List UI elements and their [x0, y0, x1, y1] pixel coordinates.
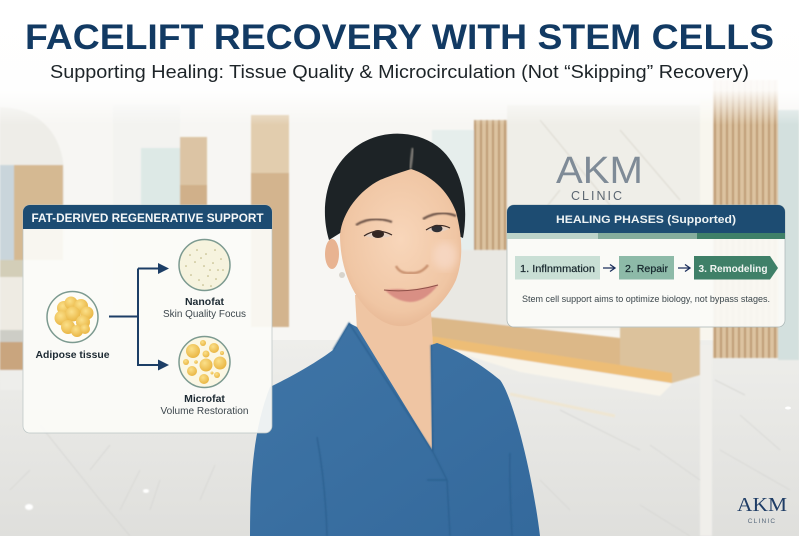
left eye: [364, 230, 392, 238]
label: nanofat: Nanofat: [185, 296, 225, 308]
logo: AKM clinic: [737, 494, 787, 525]
arrow: branching connector: [109, 263, 169, 370]
sign: AKM clinic wall logo: CLINIC: [571, 189, 624, 203]
face: [340, 169, 461, 326]
logo: AKM clinic: CLINIC: [748, 518, 776, 525]
step 1: inflammation: 1. Inflnmmation: [520, 264, 595, 275]
panel: fat-derived regenerative support: [23, 205, 272, 433]
step 1: inflammation: [515, 256, 600, 280]
step 3: remodeling: 3. Remodeling: [698, 264, 768, 275]
panel header: [507, 205, 785, 233]
neck: [355, 295, 433, 452]
hair: [325, 134, 465, 240]
logo: AKM clinic: AKM: [737, 494, 787, 516]
cheek highlight: [433, 242, 457, 270]
left eyebrow: [356, 219, 392, 225]
nose: [396, 265, 428, 273]
sign: AKM clinic wall logo: AKM: [556, 150, 643, 192]
icon: microfat: [179, 336, 230, 388]
step 2: repair: 2. Repair: [625, 264, 669, 275]
arrow: step 2 to 3: [678, 264, 690, 272]
panel heading: HEALING PHASES (Supported): [556, 214, 736, 226]
hair part: [410, 148, 413, 169]
ear: [325, 239, 339, 269]
panel header: [23, 205, 272, 229]
panel: healing phases: [507, 205, 785, 327]
label: microfat: Microfat: [184, 393, 225, 405]
mouth: [385, 285, 438, 302]
step 2: repair: [619, 256, 674, 280]
label: skin quality focus: Skin Quality Focus: [163, 309, 246, 320]
arrow: step 1 to 2: [603, 264, 615, 272]
panel heading: FAT-DERIVED REGENERATIVE SUPPORT: [32, 211, 264, 225]
blouse: [250, 323, 540, 536]
step 3: remodeling: [694, 256, 778, 280]
subtitle: Supporting Healing: Tissue Quality & Microcirculation (Not “Skipping” Recovery): [50, 61, 749, 82]
mouth line: [384, 285, 438, 291]
progress stripe: [507, 233, 785, 239]
person: clinician portrait: [250, 134, 540, 536]
title: FACELIFT RECOVERY WITH STEM CELLS: [25, 18, 774, 57]
right eyebrow: [423, 213, 456, 219]
label: adipose tissue: Adipose tissue: [36, 349, 110, 361]
icon: adipose tissue: [47, 292, 98, 342]
label: volume restoration: Volume Restoration: [160, 406, 248, 417]
earring: [339, 272, 345, 278]
icon: nanofat: [179, 240, 230, 290]
right eye: [426, 225, 450, 232]
blouse collar fold: [317, 323, 512, 536]
note: Stem cell support aims to optimize biology, not bypass stages.: [522, 294, 770, 304]
